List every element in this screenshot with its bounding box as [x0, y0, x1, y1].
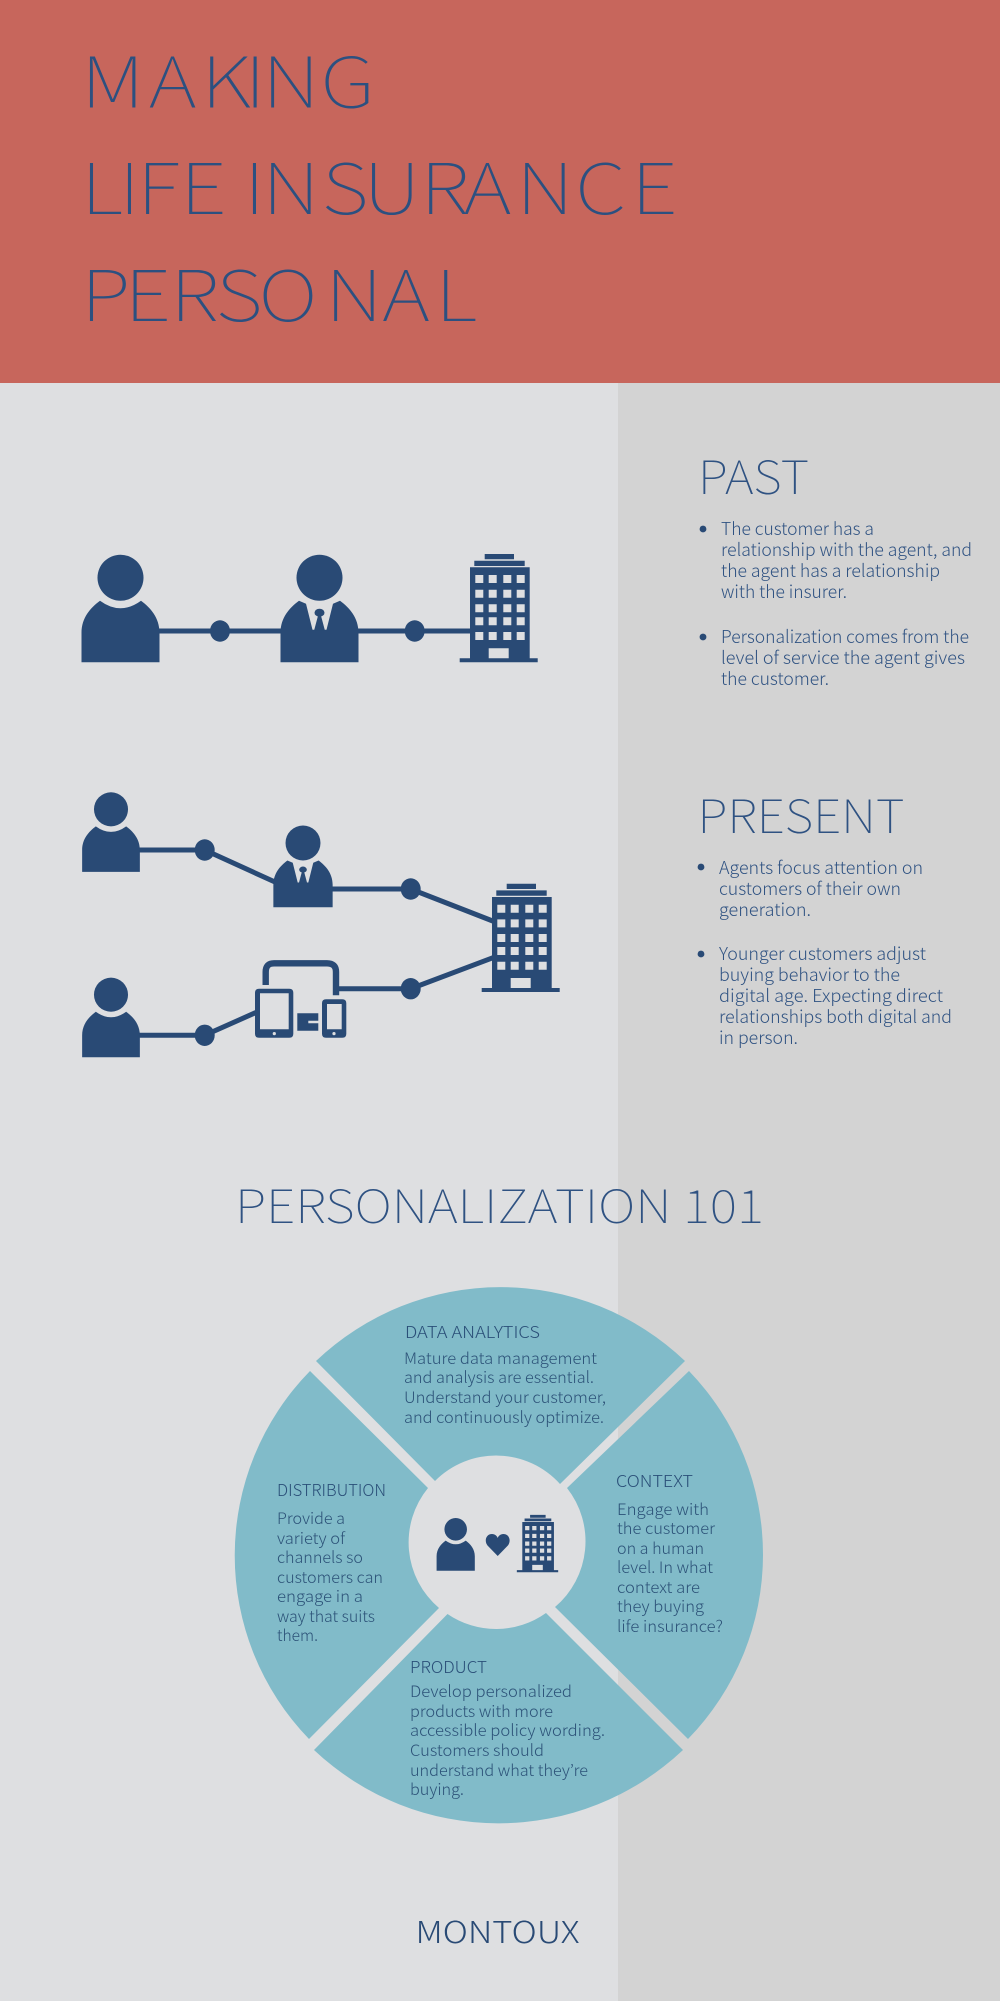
text: present bullets: Agents focus attention on	[719, 855, 923, 880]
icon: customer	[437, 1518, 475, 1571]
icon: agent	[280, 555, 358, 662]
icon: connected devices	[255, 963, 346, 1038]
panel: distribution: Provide a	[277, 1505, 345, 1529]
panel: data analytics: Understand your customer,	[404, 1384, 606, 1408]
text: present bullets: customers of their own	[719, 876, 901, 901]
panel: product: Develop personalized	[410, 1678, 572, 1702]
panel: data analytics: and analysis are essential.	[404, 1364, 594, 1388]
heading: personalization 101: PERSONALIZATION 101	[235, 1171, 764, 1237]
icon: insurer building	[460, 554, 538, 662]
panel: product: understand what they’re	[410, 1757, 588, 1781]
title: MAKING	[81, 27, 375, 129]
panel: context: the customer	[617, 1515, 715, 1539]
text: past bullets: The customer has a	[721, 516, 874, 541]
icon: customer	[82, 555, 160, 662]
panel: product	[314, 1613, 683, 1823]
panel: context	[555, 1371, 763, 1739]
panel: distribution: DISTRIBUTION	[277, 1477, 386, 1501]
text: past bullets: relationship with the agent, and	[721, 537, 972, 562]
panel: data analytics: and continuously optimize.	[404, 1404, 604, 1428]
panel: context: CONTEXT	[616, 1468, 693, 1492]
text: present bullets: Younger customers adjust	[719, 941, 926, 966]
icon: heart	[486, 1534, 510, 1556]
panel: product: PRODUCT	[410, 1654, 487, 1678]
panel: distribution	[235, 1371, 439, 1739]
connector: devices to insurer	[336, 957, 494, 999]
icon: agent	[273, 826, 333, 907]
panel: context: level. In what	[617, 1554, 713, 1578]
text: present bullets	[698, 855, 952, 1050]
background: right column	[618, 0, 1000, 2001]
connector: customer to devices	[137, 1012, 257, 1046]
heading: present: PRESENT	[698, 781, 904, 847]
text: present bullets: in person.	[719, 1025, 798, 1050]
diagram: personalization wheel	[235, 1287, 763, 1823]
panel: context: they buying	[617, 1593, 704, 1617]
title	[81, 27, 678, 342]
panel: product: products with more	[410, 1698, 553, 1722]
connector: customer to agent	[137, 839, 275, 882]
panel: product: accessible policy wording.	[410, 1717, 605, 1741]
icon: insurer building	[517, 1515, 558, 1572]
panel: distribution: variety of	[277, 1525, 346, 1549]
text: past bullets	[700, 516, 972, 691]
title: LIFE INSURANCE	[81, 134, 678, 235]
connector: agent to insurer	[357, 620, 472, 642]
text: present bullets: relationships both digital and	[719, 1004, 952, 1029]
title: PERSONAL	[81, 241, 477, 342]
panel: data analytics	[316, 1287, 685, 1484]
panel: distribution: customers can	[277, 1564, 383, 1588]
header band	[0, 0, 1000, 383]
panel: context: on a human	[617, 1535, 704, 1559]
text: past bullets: with the insurer.	[721, 579, 847, 604]
text: past bullets: Personalization comes from the	[721, 624, 969, 649]
panel: distribution: channels so	[277, 1544, 363, 1568]
connector: customer to agent	[158, 620, 282, 642]
panel: data analytics: Mature data management	[404, 1345, 597, 1369]
text: present bullets: buying behavior to the	[719, 962, 900, 987]
panel: data analytics: DATA ANALYTICS	[405, 1319, 540, 1343]
panel: distribution: engage in a	[277, 1583, 363, 1607]
background: left column	[0, 0, 618, 2001]
text: past bullets: level of service the agent gives	[721, 645, 965, 670]
panel: product: Customers should	[410, 1737, 544, 1761]
panel: context: context are	[617, 1574, 700, 1598]
text: present bullets: generation.	[719, 897, 811, 922]
diagram: past relationship chain	[82, 554, 538, 662]
panel: distribution: way that suits	[277, 1603, 375, 1627]
logo: montoux: MONTOUX	[416, 1908, 580, 1952]
panel: product: buying.	[410, 1776, 464, 1800]
icon: customer two	[82, 978, 140, 1057]
text: past bullets: the agent has a relationship	[721, 558, 940, 583]
panel: context: Engage with	[617, 1496, 709, 1520]
icon: insurer building	[482, 884, 560, 992]
text: past bullets: the customer.	[721, 666, 829, 691]
diagram: present relationship network	[82, 792, 560, 1057]
icon: customer one	[82, 792, 140, 872]
text: present bullets: digital age. Expecting direct	[719, 983, 943, 1008]
heading: past: PAST	[698, 442, 809, 508]
connector: agent to insurer	[330, 878, 494, 922]
panel: distribution: them.	[277, 1622, 318, 1646]
panel: context: life insurance?	[617, 1613, 723, 1637]
